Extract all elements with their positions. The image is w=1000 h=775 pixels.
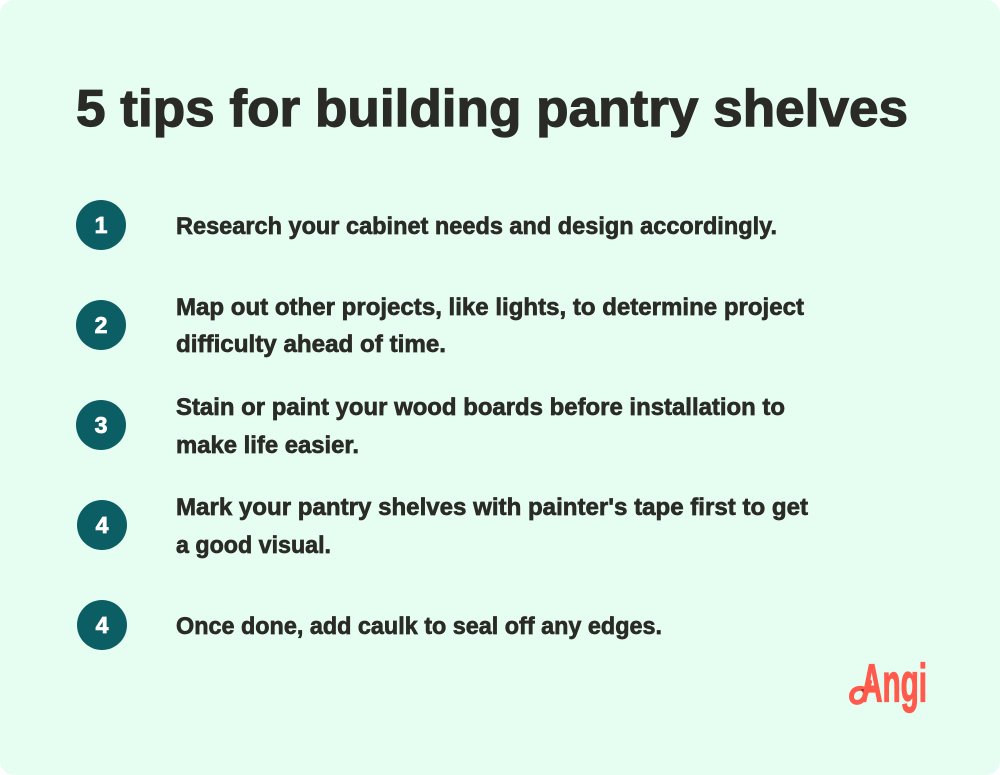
tip 3 (76, 394, 785, 459)
icon: number 2 badge: 2 (95, 312, 107, 338)
tip 4 text: a good visual. (176, 532, 331, 559)
tip 3 text (176, 394, 785, 459)
tip 4 (77, 494, 808, 559)
icon: number 4 badge, second (77, 600, 127, 650)
tip 1 text: Research your cabinet needs and design accordingly. (176, 213, 777, 240)
tip 5 text: Once done, add caulk to seal off any edges. (176, 613, 662, 640)
logo: Angi (852, 654, 927, 714)
tip 1 (76, 200, 777, 250)
icon: number 1 badge: 1 (95, 212, 108, 238)
icon: number 4 badge: 4 (96, 512, 109, 538)
tip 2 text: difficulty ahead of time. (176, 331, 446, 358)
tip 4 text: Mark your pantry shelves with painter's tape first to get (176, 494, 808, 521)
icon: number 4 badge (77, 500, 127, 550)
icon: number 2 badge (76, 300, 126, 350)
title: 5 tips for building pantry shelves (76, 80, 908, 138)
tip 3 text: Stain or paint your wood boards before installation to (176, 394, 785, 421)
tip 5 (77, 600, 662, 650)
icon: number 4 badge, second: 4 (96, 612, 109, 638)
icon: number 3 badge (76, 400, 126, 450)
tip 3 text: make life easier. (176, 432, 359, 459)
tip 4 text (176, 494, 808, 559)
tip 2 text (176, 294, 804, 358)
icon: number 1 badge (76, 200, 126, 250)
logo: Angi: Angi (861, 654, 927, 714)
tip 2 text: Map out other projects, like lights, to determine project (176, 294, 804, 321)
tip 2 (76, 294, 804, 358)
icon: number 3 badge: 3 (95, 412, 107, 438)
